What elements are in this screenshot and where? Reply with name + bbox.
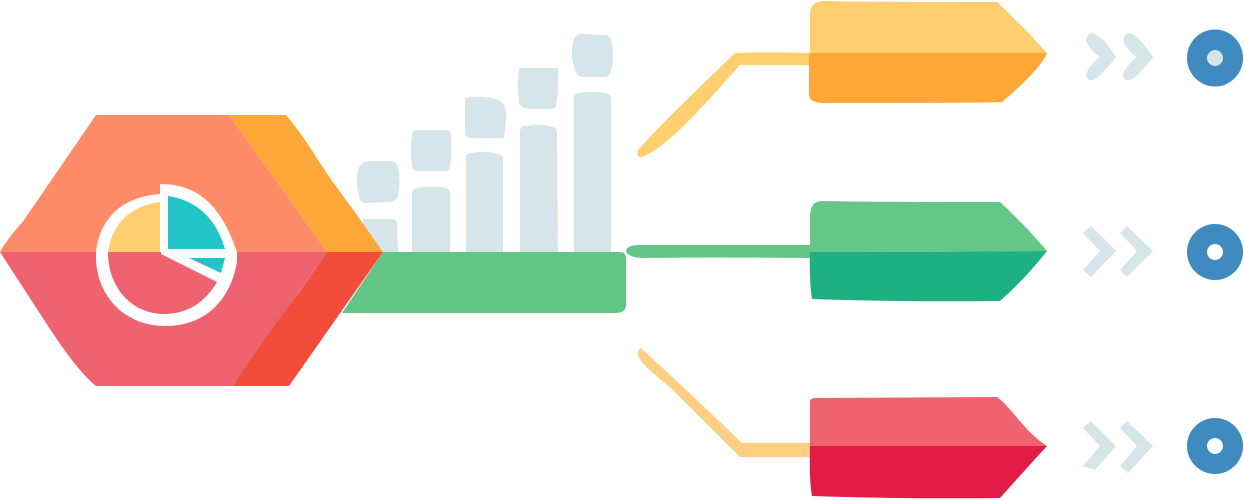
connector: middle [626,245,810,258]
hexagon icon block [0,115,383,386]
green base bar [342,252,626,313]
hexagon lower left face [0,252,327,386]
chevrons: middle [1083,226,1153,277]
target dot: top [1187,30,1243,86]
arrow: middle [810,201,1047,301]
target dot: bottom [1187,418,1243,474]
hexagon lower right face [233,252,383,386]
arrow: bottom [810,397,1047,498]
chevrons: bottom [1083,421,1153,473]
hexagon upper right face [229,115,383,252]
target dot: middle [1187,224,1243,280]
connector: bottom [638,348,810,457]
bar chart [357,34,613,252]
arrow: top [809,1,1047,103]
chevrons: top [1086,33,1153,80]
icon: pie chart [96,184,237,326]
hexagon upper left face [0,115,327,252]
connector: top [638,52,810,157]
